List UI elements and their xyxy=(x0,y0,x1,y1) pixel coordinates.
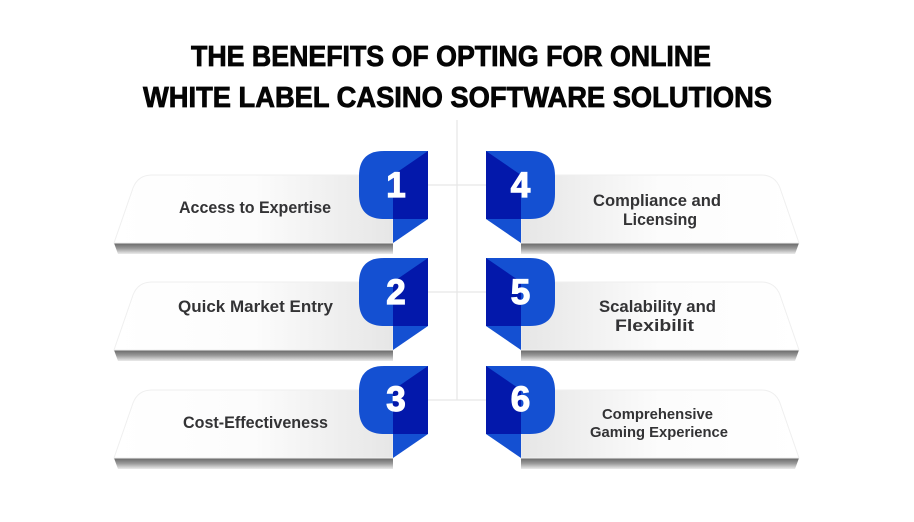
panel: item 2 Quick Market Entry: 2 xyxy=(386,273,406,312)
panel: item 3 Cost-Effectiveness: Cost-Effectiveness xyxy=(183,414,328,432)
title: WHITE LABEL CASINO SOFTWARE SOLUTIONS xyxy=(143,82,772,114)
panel: item 5 Scalability and Flexibilit: Flexibilit xyxy=(615,317,695,335)
panel: item 4 Compliance and Licensing: 4 xyxy=(511,166,531,205)
title xyxy=(143,41,772,114)
panel: item 1 Access to Expertise xyxy=(114,151,428,254)
panel: item 6 Comprehensive Gaming Experience: Gaming Experience xyxy=(590,424,728,441)
panel: item 4 Compliance and Licensing: Licensing xyxy=(623,211,697,229)
panel: item 3 Cost-Effectiveness: 3 xyxy=(386,380,406,419)
panel: item 5 Scalability and Flexibilit xyxy=(486,258,799,361)
panel: item 1 Access to Expertise: 1 xyxy=(386,166,406,205)
panel: item 2 Quick Market Entry: Quick Market Entry xyxy=(178,298,334,316)
panel: item 3 Cost-Effectiveness xyxy=(114,366,428,469)
panel: item 2 Quick Market Entry xyxy=(114,258,428,361)
panel: item 6 Comprehensive Gaming Experience: Comprehensive xyxy=(602,406,713,423)
panel: item 5 Scalability and Flexibilit: 5 xyxy=(511,273,530,312)
panel: item 4 Compliance and Licensing xyxy=(486,151,799,254)
panel: item 1 Access to Expertise: Access to Expertise xyxy=(179,199,331,217)
panel: item 5 Scalability and Flexibilit: Scalability and xyxy=(599,298,716,316)
title: THE BENEFITS OF OPTING FOR ONLINE xyxy=(191,41,711,73)
panel: item 4 Compliance and Licensing: Compliance and xyxy=(593,192,721,210)
central connector lines xyxy=(428,120,486,400)
panel: item 6 Comprehensive Gaming Experience xyxy=(486,366,799,469)
panel: item 6 Comprehensive Gaming Experience: 6 xyxy=(511,380,530,419)
